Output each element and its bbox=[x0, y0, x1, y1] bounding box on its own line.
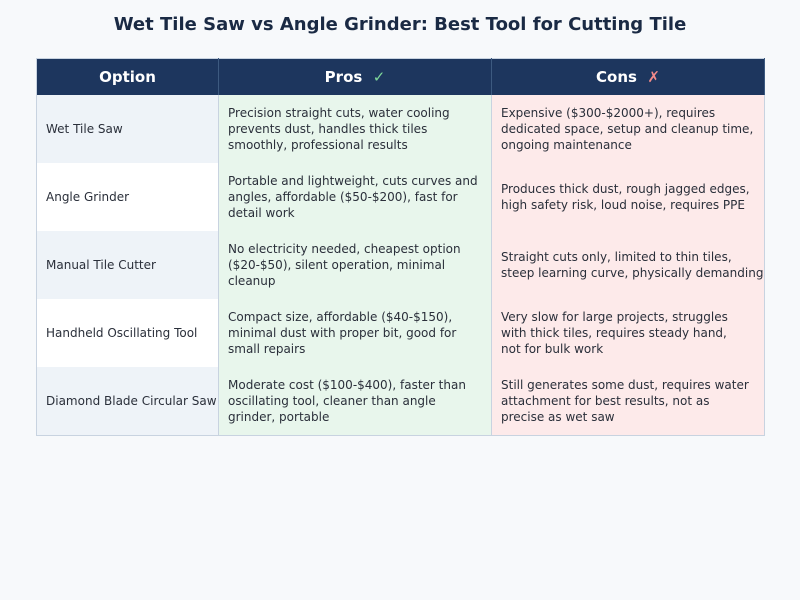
comparison table: Diamond Blade Circular Saw bbox=[46, 394, 217, 408]
comparison table: ongoing maintenance bbox=[501, 138, 632, 152]
comparison table: Expensive ($300-$2000+), requires bbox=[501, 106, 715, 120]
comparison table: Option bbox=[99, 68, 156, 86]
comparison table: with thick tiles, requires steady hand, bbox=[501, 326, 727, 340]
comparison table: Pros ✓ bbox=[325, 68, 385, 86]
comparison table: Moderate cost ($100-$400), faster than bbox=[228, 378, 466, 392]
comparison table: Wet Tile Saw bbox=[46, 122, 123, 136]
comparison table: Manual Tile Cutter bbox=[46, 258, 156, 272]
comparison table: not for bulk work bbox=[501, 342, 603, 356]
comparison table: Compact size, affordable ($40-$150), bbox=[228, 310, 452, 324]
comparison table: detail work bbox=[228, 206, 295, 220]
comparison table: grinder, portable bbox=[228, 410, 329, 424]
title: Wet Tile Saw vs Angle Grinder: Best Tool for Cutting Tile bbox=[114, 14, 686, 35]
comparison table: ($20-$50), silent operation, minimal bbox=[228, 258, 445, 272]
comparison table: prevents dust, handles thick tiles bbox=[228, 122, 427, 136]
comparison table: Very slow for large projects, struggles bbox=[501, 310, 728, 324]
comparison table: Portable and lightweight, cuts curves and bbox=[228, 174, 478, 188]
comparison table: small repairs bbox=[228, 342, 305, 356]
comparison table: Produces thick dust, rough jagged edges, bbox=[501, 182, 750, 196]
comparison table: oscillating tool, cleaner than angle bbox=[228, 394, 436, 408]
comparison table: dedicated space, setup and cleanup time, bbox=[501, 122, 753, 136]
comparison table bbox=[36, 58, 765, 436]
comparison table: Handheld Oscillating Tool bbox=[46, 326, 197, 340]
comparison table: Precision straight cuts, water cooling bbox=[228, 106, 450, 120]
comparison table: Still generates some dust, requires water bbox=[501, 378, 749, 392]
comparison table: angles, affordable ($50-$200), fast for bbox=[228, 190, 458, 204]
comparison table: cleanup bbox=[228, 274, 276, 288]
comparison table: precise as wet saw bbox=[501, 410, 615, 424]
comparison table: attachment for best results, not as bbox=[501, 394, 710, 408]
comparison table: minimal dust with proper bit, good for bbox=[228, 326, 456, 340]
comparison table: No electricity needed, cheapest option bbox=[228, 242, 461, 256]
comparison table: Cons ✗ bbox=[596, 68, 660, 86]
comparison table: steep learning curve, physically demanding bbox=[501, 266, 763, 280]
comparison table: Angle Grinder bbox=[46, 190, 129, 204]
comparison table: high safety risk, loud noise, requires PPE bbox=[501, 198, 745, 212]
comparison table: Straight cuts only, limited to thin tiles, bbox=[501, 250, 732, 264]
comparison table: smoothly, professional results bbox=[228, 138, 408, 152]
